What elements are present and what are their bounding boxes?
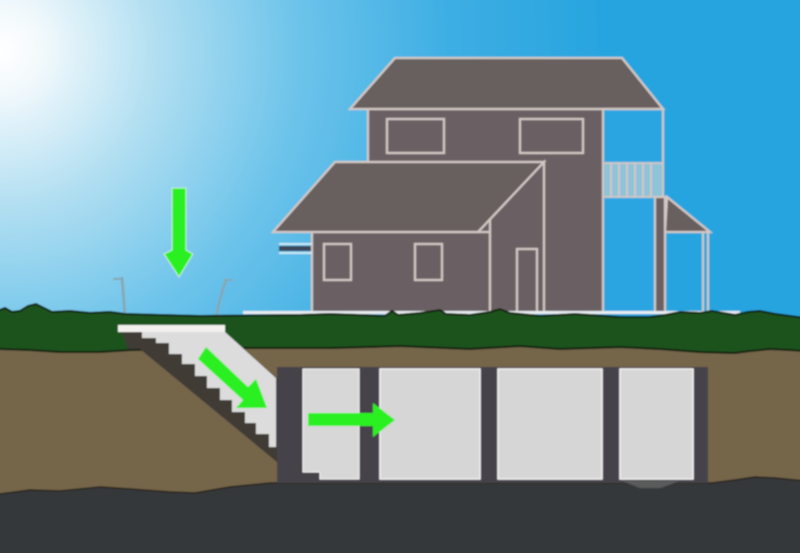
balcony support column: [655, 197, 665, 313]
ground line: [243, 311, 740, 314]
lower window left: [324, 244, 351, 280]
balcony railing: [603, 163, 663, 197]
porch post: [703, 232, 708, 313]
lamp post right: [216, 280, 233, 318]
door: [517, 249, 537, 313]
gable section: [490, 162, 544, 313]
basement room 4: [620, 369, 693, 479]
basement room 3: [498, 369, 602, 479]
upper window right: [520, 119, 583, 153]
lower storey wall: [312, 232, 490, 313]
arrow: down into ground: [164, 188, 193, 277]
lamp post left: [113, 277, 125, 316]
soil: [0, 340, 800, 494]
arrow: into basement: [308, 403, 395, 437]
bedrock: [0, 470, 800, 553]
basement floor patch: [622, 481, 680, 488]
grass: [0, 304, 800, 353]
house: [273, 58, 710, 313]
basement room 1: [303, 369, 359, 479]
lower roof: [273, 162, 544, 232]
stair top slab: [118, 325, 225, 332]
basement walls: [277, 367, 708, 483]
stair treads: [142, 332, 276, 447]
stair dark edge: [122, 332, 277, 462]
basement room 2: [380, 369, 480, 479]
sky background: [0, 0, 800, 325]
balcony upper frame: [603, 109, 663, 197]
stairwell: [118, 325, 277, 462]
balcony opening tint: [603, 109, 663, 313]
lower window right: [415, 244, 442, 280]
porch roof: [665, 197, 710, 232]
upper storey wall: [368, 109, 603, 313]
side awning beam: [279, 243, 312, 254]
upper window left: [387, 119, 444, 153]
arrow: down the stairs: [198, 347, 267, 408]
upper roof: [350, 58, 663, 109]
